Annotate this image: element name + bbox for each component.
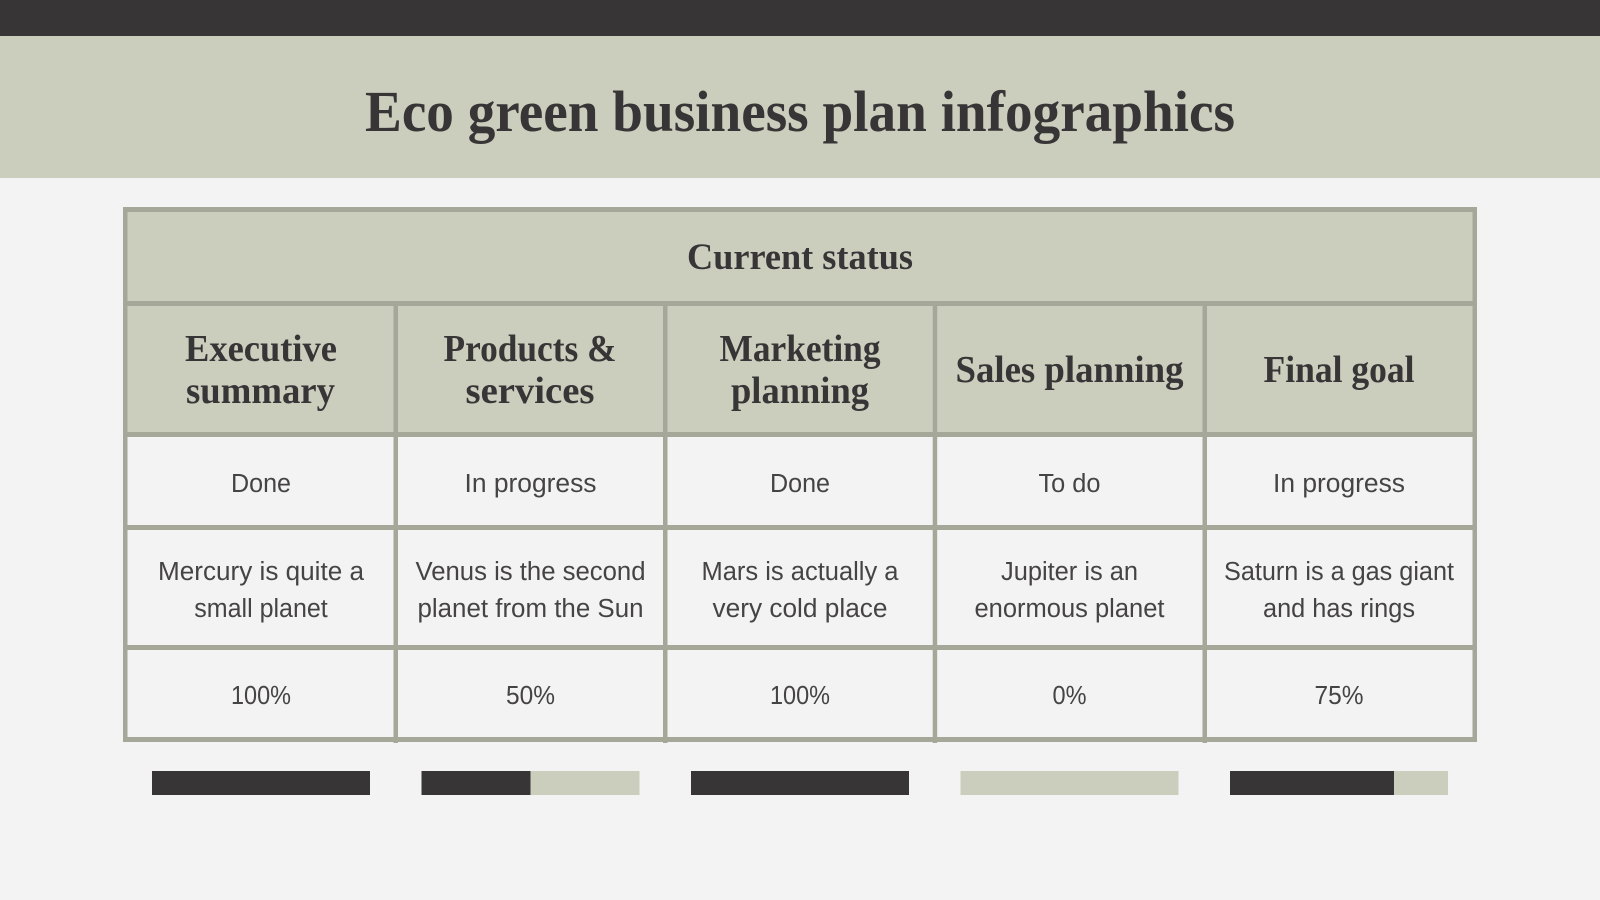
column heading: marketing planning (720, 328, 880, 412)
description row (158, 558, 1454, 623)
status row: In progress (464, 470, 596, 498)
heading: current status: Current status (687, 237, 913, 278)
percentage row: 100% (770, 682, 830, 710)
description: saturn (1224, 558, 1454, 623)
description: venus: planet from the Sun (418, 595, 644, 623)
progress bar: 75% (1230, 771, 1448, 795)
description: jupiter: Jupiter is an (1001, 558, 1138, 586)
column heading: executive summary: summary (186, 370, 335, 412)
description: mercury (158, 558, 365, 623)
description: mercury: Mercury is quite a (158, 558, 365, 586)
description: jupiter (974, 558, 1164, 623)
description: venus: Venus is the second (416, 558, 646, 586)
column heading: products and services: Products & (444, 328, 616, 370)
description: mercury: small planet (194, 595, 328, 623)
description: mars: very cold place (712, 595, 888, 623)
column heading: final goal: Final goal (1264, 349, 1414, 391)
status row: Done (231, 470, 291, 498)
description: saturn: Saturn is a gas giant (1224, 558, 1454, 586)
status row (231, 470, 1405, 498)
progress bar: 0% (960, 771, 1178, 795)
description: mars: Mars is actually a (702, 558, 899, 586)
description: jupiter: enormous planet (974, 595, 1164, 623)
top dark bar (0, 0, 1600, 36)
percentage row: 75% (1314, 682, 1364, 710)
title: Eco green business plan infographics (365, 79, 1235, 144)
description: mars (702, 558, 899, 623)
table grid (123, 207, 1477, 743)
percentage row (231, 682, 1364, 710)
percentage row: 50% (506, 682, 555, 710)
status table (123, 207, 1477, 743)
column heading: sales planning: Sales planning (956, 349, 1184, 391)
column heading: executive summary: Executive (185, 328, 337, 370)
progress bar: 100% (152, 771, 370, 795)
column heading: marketing planning: planning (731, 370, 869, 412)
progress bar: 100% (691, 771, 909, 795)
percentage row: 0% (1052, 682, 1086, 710)
title band (0, 36, 1600, 178)
description: venus (416, 558, 646, 623)
column heading: executive summary (185, 328, 337, 412)
percentage row: 100% (231, 682, 291, 710)
status row: In progress (1273, 470, 1405, 498)
progress bar: 50% (422, 771, 640, 795)
progress bars (152, 771, 1448, 795)
description: saturn: and has rings (1263, 595, 1415, 623)
column heading: products and services: services (466, 370, 594, 412)
column heading: products and services (444, 328, 616, 412)
status row: Done (770, 470, 830, 498)
status row: To do (1038, 470, 1100, 498)
column heading: marketing planning: Marketing (720, 328, 880, 370)
